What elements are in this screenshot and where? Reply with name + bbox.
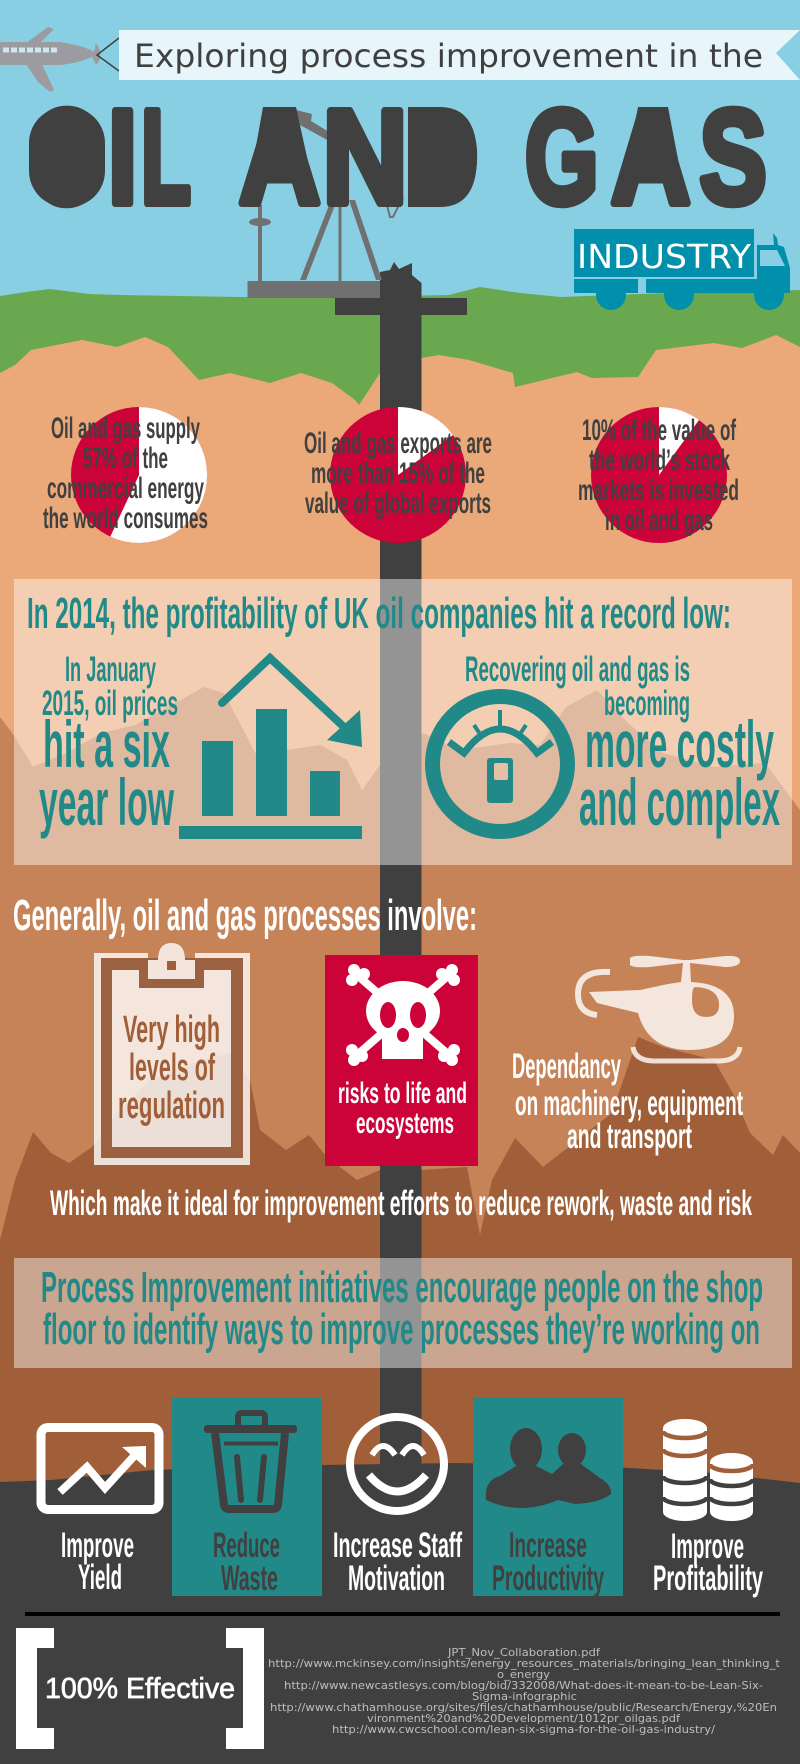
- text: oil prices: In January: [65, 650, 156, 689]
- stat: 10% pie: in oil and gas: [605, 504, 713, 537]
- text: oil prices: year low: [39, 765, 174, 839]
- icon: plane: [0, 27, 119, 92]
- references: http://www.newcastlesys.com/blog/bid/332008/What-does-it-mean-to-be-Lean-Six-: [284, 1679, 763, 1692]
- benefit: increase productivity: Increase: [509, 1526, 587, 1565]
- title: OIL AND GAS: G: [525, 83, 599, 232]
- text: oil prices: hit a six: [43, 707, 170, 781]
- logo: 100% Effective brackets: 100% Effective: [45, 1673, 235, 1705]
- benefit: improve yield: [41, 1428, 159, 1597]
- icon: clipboard with regulation text: Very high: [123, 1009, 220, 1051]
- icon: two people: [486, 1428, 611, 1508]
- text: dependancy on machinery: [512, 1047, 743, 1156]
- references: http://www.cwcschool.com/lean-six-sigma-for-the-oil-gas-industry/: [332, 1723, 715, 1736]
- background: mid soil layer: [0, 687, 800, 1300]
- background: orange soil layer: [0, 335, 800, 900]
- background: deep soil layer: [0, 1037, 800, 1500]
- stat: 57% pie: commercial energy: [47, 472, 204, 505]
- icon: rising graph: [41, 1428, 159, 1510]
- references: Sigma-infographic: [472, 1690, 577, 1703]
- benefit: increase productivity: Productivity: [492, 1559, 604, 1598]
- icon: pump jack: [248, 110, 403, 298]
- references: JPT_Nov_Collaboration.pdf: [447, 1646, 601, 1659]
- title: OIL AND GAS: [29, 83, 767, 232]
- panel: risks to life: ecosystems: [356, 1107, 454, 1140]
- stat: 57% pie: [43, 407, 208, 543]
- benefit: reduce waste: [172, 1398, 322, 1598]
- stat: 57% pie: Oil and gas supply: [51, 412, 200, 445]
- benefit: improve yield: Yield: [78, 1558, 122, 1597]
- text: oil prices: [39, 650, 178, 839]
- background: sky: [0, 0, 800, 320]
- title: OIL AND GAS: L: [141, 83, 191, 232]
- icon: skull and crossbones: [346, 964, 460, 1066]
- text: dependancy on machinery: and transport: [567, 1117, 692, 1156]
- stat: 15% pie: more than 15% of the: [311, 457, 485, 490]
- benefit: increase staff motivation: Increase Staff: [333, 1526, 462, 1565]
- text: recovering costs: becoming: [604, 684, 690, 723]
- background: green ground: [0, 287, 800, 420]
- panel: process improvement initiatives: [14, 1258, 792, 1368]
- stat: 57% pie: 57% of the: [83, 442, 168, 475]
- stat: 10% pie: [578, 407, 739, 543]
- logo: 100% Effective brackets: [16, 1628, 264, 1749]
- icon: pressure gauge: [432, 696, 568, 832]
- references: o_energy: [497, 1668, 551, 1681]
- text: oil prices: 2015, oil prices: [42, 684, 178, 723]
- icon: falling bar chart: [179, 658, 362, 839]
- background: dark bedrock: [0, 1463, 800, 1764]
- panel: risks to life: risks to life and: [338, 1077, 467, 1110]
- references: http://www.mckinsey.com/insights/energy_resources_materials/bringing_lean_thinking_t: [268, 1657, 781, 1670]
- title: OIL AND GAS: O: [29, 83, 105, 232]
- icon: clipboard with regulation text: [94, 943, 250, 1165]
- icon: coin stacks: [663, 1419, 753, 1521]
- subtitle banner: [119, 30, 800, 80]
- icon: clipboard with regulation text: levels of: [129, 1047, 215, 1089]
- benefit: improve profitability: [653, 1419, 763, 1598]
- icon: clipboard with regulation text: regulation: [118, 1085, 225, 1127]
- text: recovering costs: [465, 650, 780, 839]
- title: OIL AND GAS: D: [404, 83, 478, 232]
- stat: 15% pie: value of global exports: [305, 487, 491, 520]
- benefit: increase staff motivation: Motivation: [348, 1559, 445, 1598]
- title: OIL AND GAS: A: [611, 83, 690, 232]
- benefit: increase staff motivation: [333, 1417, 462, 1598]
- benefit: reduce waste: Reduce: [213, 1526, 280, 1565]
- references: [268, 1646, 781, 1736]
- title: OIL AND GAS: A: [239, 83, 320, 232]
- references: http://www.chathamhouse.org/sites/files/chathamhouse/public/Research/Energy,%20En: [270, 1701, 777, 1714]
- oil pipe: [335, 262, 467, 1490]
- icon: trash can: [204, 1413, 297, 1509]
- references: vironment%20and%20Development/1012pr_oilgas.pdf: [367, 1712, 681, 1725]
- title: OIL AND GAS: N: [322, 83, 408, 232]
- panel: record low profitability: [14, 579, 792, 865]
- benefit: improve yield: Improve: [61, 1526, 134, 1565]
- panel: risks to life: [325, 955, 478, 1166]
- text: dependancy on machinery: Dependancy: [512, 1047, 621, 1086]
- title: OIL AND GAS: I: [108, 83, 137, 232]
- stat: 15% pie: [304, 407, 492, 543]
- icon: truck with INDUSTRY label: INDUSTRY: [577, 237, 752, 276]
- subtitle banner: Exploring process improvement in the: [134, 37, 763, 75]
- icon: helicopter: [578, 956, 740, 1061]
- benefit: reduce waste: Waste: [221, 1559, 278, 1598]
- title: OIL AND GAS: S: [700, 83, 767, 232]
- benefit: increase productivity: [473, 1398, 623, 1598]
- icon: truck with INDUSTRY label: [574, 229, 790, 310]
- stat: 57% pie: the world consumes: [43, 502, 208, 535]
- icon: smiley face: [350, 1417, 444, 1511]
- stat: 15% pie: Oil and gas exports are: [304, 427, 492, 460]
